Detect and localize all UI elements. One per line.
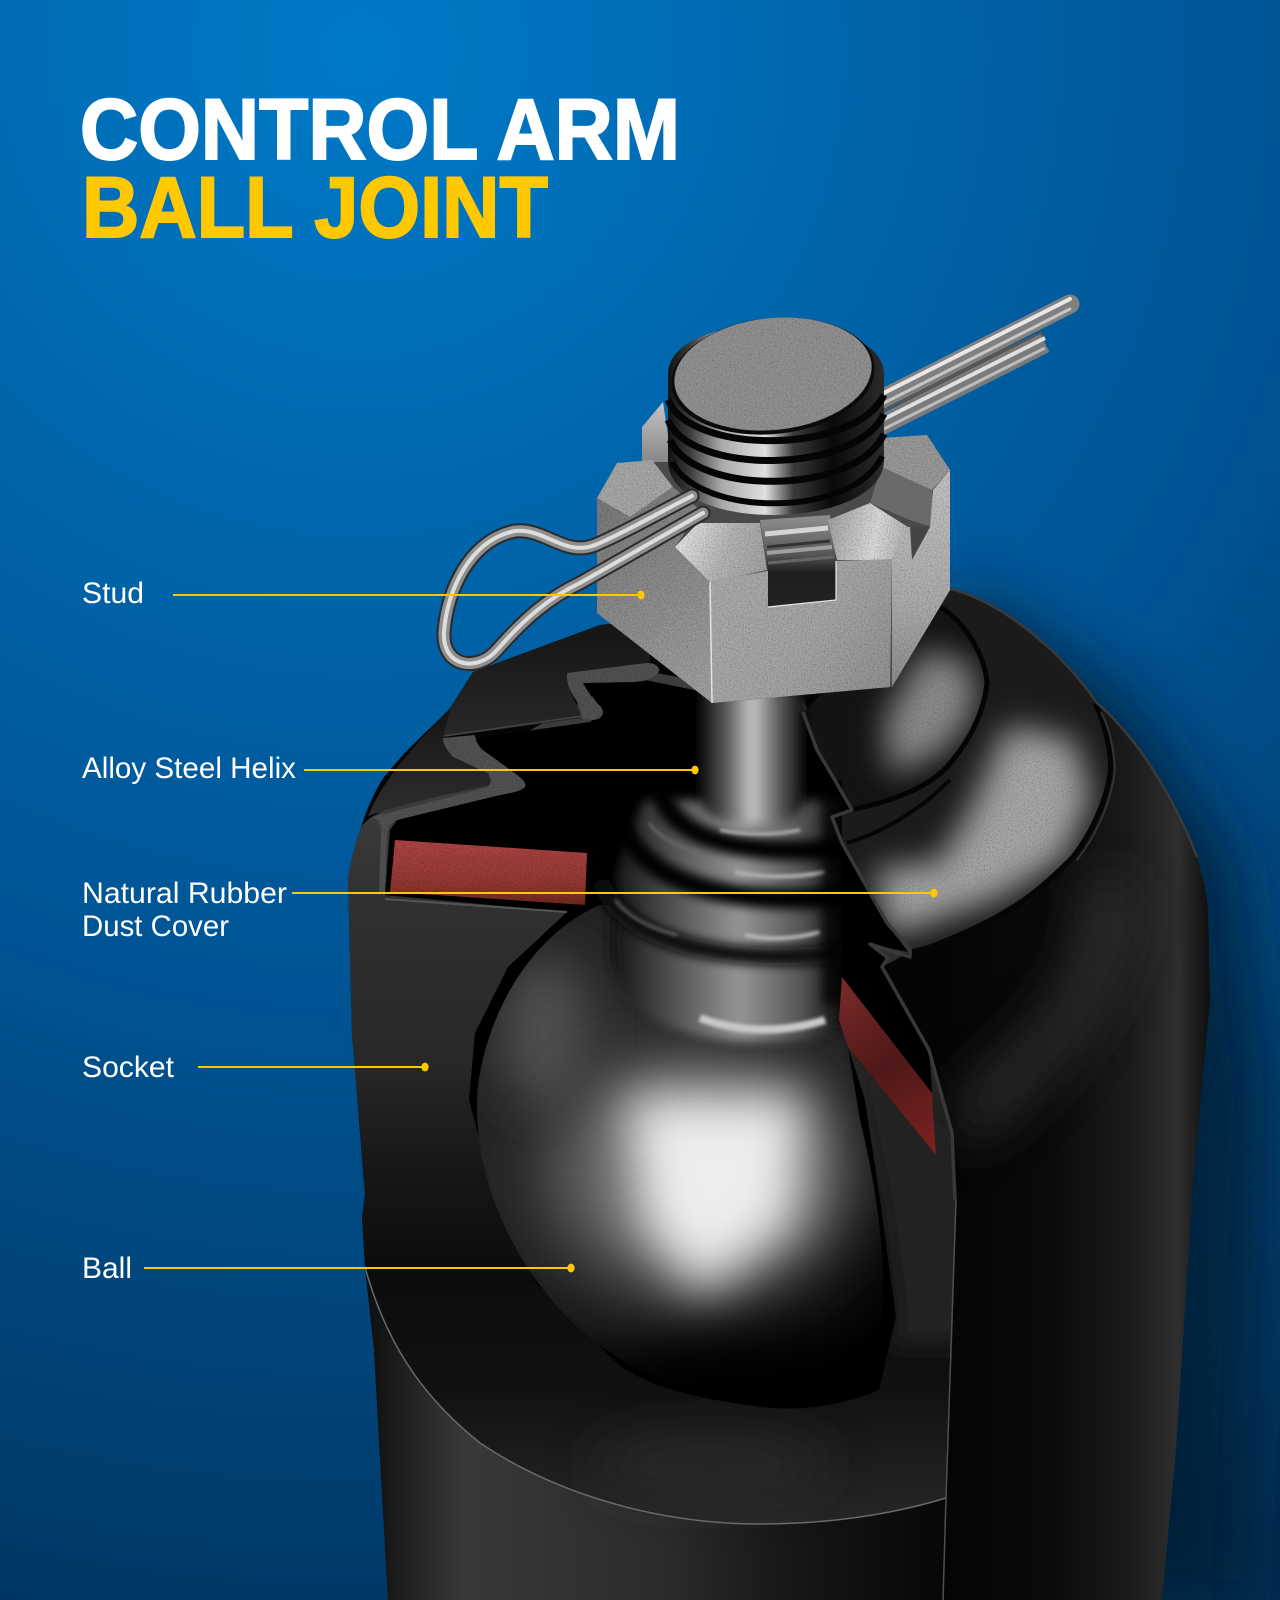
housing lower left outer surface: [365, 1269, 882, 1600]
callout: Stud: Stud: [82, 577, 144, 610]
back left crown: [642, 402, 672, 462]
slot interior: [760, 515, 836, 607]
shell upper line: [444, 716, 582, 736]
ball soft mid glow: [550, 1060, 850, 1290]
right crown top: [882, 435, 950, 490]
callout: Socket: Socket: [82, 1051, 175, 1084]
shell upper piece: [443, 620, 650, 737]
front left crown: [675, 523, 767, 582]
slot thread highlights: [765, 528, 834, 563]
cotter pin loop: [444, 496, 703, 664]
dome shell edge highlight: [947, 588, 1197, 857]
ball joint housing: [340, 580, 1220, 1600]
neck ring highlight 2: [735, 872, 825, 876]
neck ring highlight 4: [700, 1018, 825, 1030]
left crown: [597, 460, 673, 517]
thread grooves: [668, 395, 884, 503]
title line 1: CONTROL ARM: [80, 82, 680, 178]
right red seal section: [839, 967, 936, 1155]
callout: Natural Rubber Dust Cover: Natural Rubber: [82, 877, 287, 910]
black interior cavity: [385, 680, 936, 1408]
rubber boot right side: [803, 588, 1197, 952]
neck dark band 1: [620, 820, 850, 899]
cross-section boot profile right: [803, 712, 955, 1200]
flange outer edge: [910, 703, 1110, 952]
stud thread: [665, 308, 884, 515]
cutaway wall: [340, 670, 955, 1524]
title: [80, 82, 680, 256]
ball and neck: [477, 692, 883, 1362]
right crown under: [870, 465, 932, 527]
flange outer edge sheen: [1077, 712, 1115, 860]
body shadow: [900, 580, 1265, 1600]
left red seal section: [385, 840, 587, 912]
upper left shell: [368, 620, 650, 816]
ball: [477, 905, 883, 1362]
boot cross-section strip upper: [567, 663, 659, 720]
castle nut front: [597, 470, 950, 703]
callout: Ball: [82, 1252, 575, 1285]
stud shaft: [699, 690, 806, 824]
neck left arc 2: [615, 900, 677, 935]
stud top face: [669, 308, 877, 440]
flange highlight: [875, 727, 1090, 935]
left face: [597, 487, 712, 703]
bellow highlight: [885, 650, 975, 775]
callout: Socket: [82, 1051, 429, 1084]
bellow edge: [850, 607, 987, 810]
neck ring highlight 1: [720, 830, 800, 834]
neck base: [609, 800, 860, 1042]
right seal shadow sliver: [845, 967, 932, 1090]
boot flange base: [803, 588, 1110, 952]
ball upper gloss: [500, 955, 590, 1105]
bellow lower groove: [847, 780, 950, 843]
neck left arc 1: [648, 822, 688, 848]
right side wall band: [876, 1142, 956, 1349]
castle nut back: [597, 402, 950, 703]
lower rim line: [365, 1267, 946, 1524]
nut front edge: [710, 582, 712, 703]
soft highlight on right shoulder: [960, 880, 1133, 1150]
seam line: [943, 1133, 956, 1600]
right notch: [910, 527, 930, 560]
right face: [892, 470, 950, 687]
cotter pin rods behind stud: [870, 299, 1070, 436]
inner bellow: [803, 607, 987, 810]
shell lower piece: [368, 708, 492, 816]
callout: Alloy Steel Helix: Alloy Steel Helix: [82, 752, 296, 785]
callout: Natural Rubber Dust Cover: Dust Cover: [82, 910, 229, 943]
title line 2: BALL JOINT: [82, 160, 548, 256]
thread cylinder: [668, 325, 884, 515]
neck: [600, 770, 862, 1042]
neck dark band 0: [660, 790, 850, 850]
callout: Ball: Ball: [82, 1252, 132, 1285]
slot light edges: [768, 561, 836, 607]
nut base: [597, 438, 950, 703]
stud top ring: [665, 308, 881, 444]
neck right fade: [815, 780, 842, 1008]
neck ring highlight 3: [745, 932, 820, 938]
callout: Alloy Steel Helix: [82, 752, 699, 785]
neck dark band 2: [600, 880, 850, 956]
front face: [710, 559, 892, 703]
callout: Natural Rubber Dust Cover: [82, 877, 938, 943]
ball bottom shade: [626, 1329, 753, 1390]
ball main highlight: [625, 1095, 805, 1295]
left seal lower edge: [385, 899, 567, 912]
housing right outer surface: [340, 580, 1220, 1600]
glow on lower cut face: [639, 1436, 780, 1470]
boot cross-section strip lower: [372, 735, 525, 895]
callout: Stud: [82, 577, 645, 610]
front right crown: [828, 503, 908, 560]
